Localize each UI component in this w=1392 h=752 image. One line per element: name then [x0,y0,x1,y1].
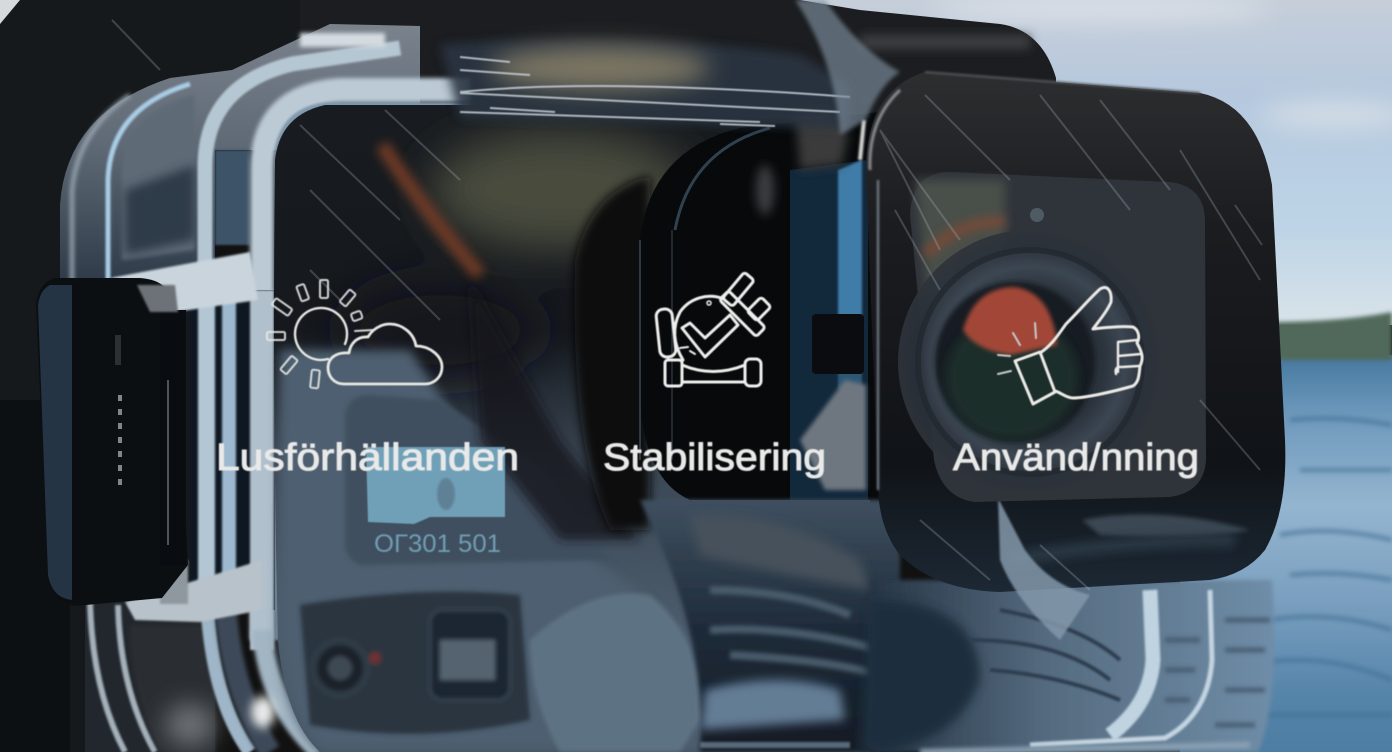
icon: sun and cloud [267,280,442,388]
label: Stabilisering: Stabilisering [603,437,826,479]
clear housing lower left [85,290,320,752]
column: Lusförhållanden [216,280,519,479]
lens window [898,172,1206,502]
housing window [274,105,870,752]
lower housing reflections [640,500,1274,752]
column: Användning [953,287,1199,479]
central camera block [574,109,880,530]
scratches [112,20,1262,590]
hood details [860,72,1250,640]
lens hood [866,72,1285,592]
housing top bands [440,39,850,128]
clear housing left side [60,24,470,640]
icon: stabilizer with checkmark [656,272,771,386]
column: Stabilisering [603,272,826,479]
translucent flap [530,593,700,752]
label: Användning: Använd/nning [953,437,1199,479]
icon: thumbs up [998,287,1142,404]
memory card display [366,447,505,558]
camera buttons [300,592,530,734]
label: Lusförhällanden: Lusförhällanden [216,437,519,479]
camera body top [300,0,1056,140]
plastic film at top [795,0,900,135]
fabric at left [0,0,340,752]
memory card display: OГ301 501 [374,530,501,558]
side latch [36,252,262,622]
background: sky, trees and water [800,0,1392,752]
